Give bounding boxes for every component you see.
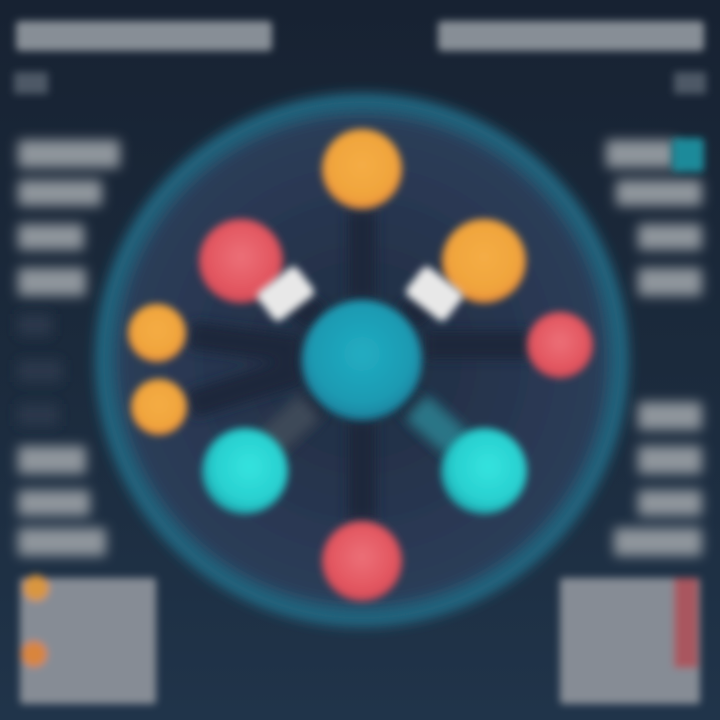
circular diagram [104,102,620,618]
node: right red [527,312,593,378]
center hub [302,300,422,420]
connector chip: upper left white [255,264,316,323]
panel: bottom right table [560,578,700,704]
small label left [14,72,48,94]
right list upper [606,140,702,296]
left list lower [18,446,106,556]
node: left orange lower [131,379,187,435]
connector chip: upper right white [404,264,465,323]
left list upper [18,140,120,296]
table marker orange lower [21,641,47,667]
outer ring [104,102,620,618]
node: lower left teal [202,428,288,514]
right list lower [614,402,702,556]
right teal badge [672,138,704,172]
diagram disc [106,104,618,616]
title bar right [438,21,704,51]
node: bottom red [322,521,402,601]
node: upper left red [199,219,283,303]
small label right [674,72,706,94]
node: upper right amber [442,219,526,303]
node: left orange upper [128,304,186,362]
table red stripe [674,578,698,668]
connector chip: lower left slate [258,394,322,456]
title bar left [16,21,272,51]
node: top orange [322,129,402,209]
panel: bottom left table [20,575,156,704]
left dim list [18,314,62,426]
node: lower right teal [441,428,527,514]
connector lines [190,210,530,520]
table marker orange top [23,575,49,601]
connector chip: lower right teal [404,394,468,456]
